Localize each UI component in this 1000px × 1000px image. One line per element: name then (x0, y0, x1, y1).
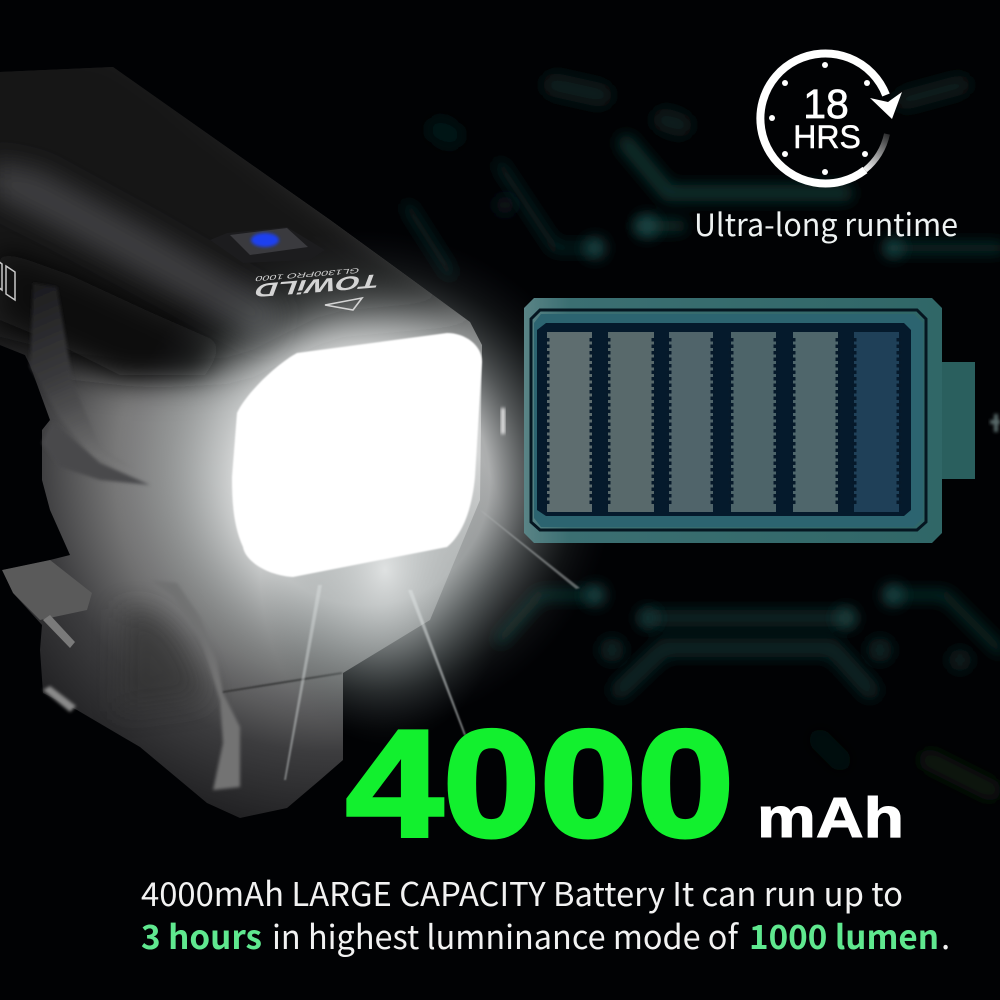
brand mark: TOWiLD (251, 269, 383, 301)
battery icon (524, 298, 1000, 543)
body glint (501, 408, 505, 434)
HRS: HRS (793, 119, 861, 155)
printed digits on side (0, 258, 15, 300)
light rays (284, 510, 580, 780)
inner ring (534, 314, 923, 527)
dark upper housing (0, 114, 475, 404)
description line 2: 1000 lumen (749, 911, 939, 959)
description line 2: in highest lumninance mode of (272, 911, 739, 959)
description line 1: 4000mAh LARGE CAPACITY Battery It can run up to (141, 868, 903, 916)
mAh: mAh (757, 786, 904, 850)
circuit board traces (408, 85, 1000, 790)
strap (30, 283, 133, 468)
faint plus sign (990, 414, 1000, 432)
description line 2: . (941, 911, 950, 959)
runtime caption: Ultra-long runtime (694, 200, 958, 245)
crescent (42, 422, 150, 485)
serrated cell edges (547, 338, 899, 506)
glow around the lamp (115, 230, 615, 730)
arrow head (870, 92, 902, 119)
18: 18 (803, 81, 849, 127)
description (141, 868, 950, 959)
clamp interior (118, 608, 208, 712)
clamp seam (223, 673, 342, 692)
lamp lens (232, 333, 482, 577)
4000 mAh headline (346, 699, 904, 869)
description line 2: 3 hours (141, 911, 262, 959)
brand mark: GL1300PRO 1000 (254, 266, 361, 283)
battery terminal (942, 362, 975, 479)
hour dots (769, 62, 870, 175)
brand mark (251, 266, 383, 310)
4000: 4000 (346, 699, 734, 869)
power button with blue indicator (210, 227, 325, 263)
clamp arc band (150, 580, 240, 790)
mount blocks (2, 560, 92, 620)
battery interior (537, 323, 911, 516)
glow below the lamp (260, 395, 510, 745)
casing groove (531, 310, 926, 530)
battery outer casing (524, 298, 942, 543)
highlight band on housing (0, 160, 280, 345)
bike light with mount (0, 67, 583, 818)
description line 2 (141, 911, 950, 959)
clock icon: 18 hrs (760, 53, 902, 183)
charge cells (547, 332, 899, 512)
light body and clamp (0, 30, 490, 830)
dark hollow under housing (0, 250, 225, 375)
clock ring (760, 53, 886, 183)
glowing tab (43, 686, 76, 712)
